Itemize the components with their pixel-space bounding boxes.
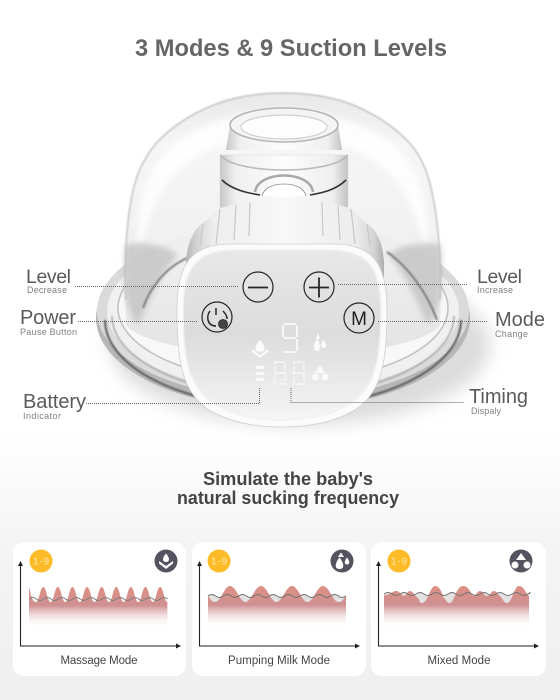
level badge [388,550,410,572]
subheading: Simulate the baby's [203,469,373,489]
axes [18,561,181,648]
label: Massage Mode [60,655,138,667]
callout: level decrease: Decrease [27,285,67,295]
callout: power pause: Pause Button [20,327,77,337]
subheading [177,469,399,508]
card background [371,542,546,676]
callout: mode change: Mode [495,309,545,331]
dome highlight [138,110,428,260]
axes [197,561,360,648]
callout: battery indicator: Battery [23,391,86,413]
dome lower side shading [124,243,442,325]
neck [220,108,348,208]
title: 3 Modes & 9 Suction Levels [135,35,447,62]
device outer rim [177,244,387,427]
axes [376,561,539,648]
LED massage icon [252,340,268,358]
level badge [30,550,52,572]
callout: mode change: Change [495,329,528,339]
plus button [304,272,334,302]
callout: timing display: Dispaly [471,406,502,416]
callout lines [75,284,487,404]
level badge: 1-9 [391,556,407,568]
massage mode icon [154,550,178,572]
subheading: natural sucking frequency [177,488,399,508]
device collar [186,198,384,300]
chart: massage waveform [29,587,168,628]
dome outline [125,93,440,300]
panel: pumping milk mode [192,542,366,676]
chart: mixed waveform [384,586,530,628]
callout: timing display: Timing [469,386,528,408]
collar ribs [200,202,370,246]
power button [202,302,232,332]
level badge: 1-9 [33,556,49,568]
card background [13,542,186,676]
control panel face [183,250,381,420]
LED battery indicator [256,366,264,381]
shadow under flange [110,265,490,425]
panel: mixed mode [371,542,546,676]
label: Mixed Mode [428,655,490,667]
pumping mode icon [330,550,354,572]
level badge: 1-9 [211,556,227,568]
callout: level increase: Level [477,266,522,288]
minus button [243,272,273,302]
product: breast pump [96,93,490,427]
label: Pumping Milk Mode [228,655,330,667]
LED timing digits [275,362,304,384]
mixed mode icon [510,550,532,572]
LED level digit [282,323,298,353]
mode button: M [351,309,367,330]
transparent dome [125,93,440,355]
callout: level decrease: Level [26,266,71,288]
LED mixed mode icon [312,365,328,380]
card background [192,542,366,676]
dome inner swirl reflections [143,252,437,320]
LED pumping drops icon [314,333,326,351]
chart: pumping waveform [208,586,346,628]
level badge [208,550,230,572]
callout: battery indicator: Indicator [23,411,61,421]
callout: power pause: Power [20,307,76,329]
panel: massage mode [13,542,186,676]
flange ring [96,223,470,409]
mode button [344,303,374,333]
callout: level increase: Increase [477,285,513,295]
